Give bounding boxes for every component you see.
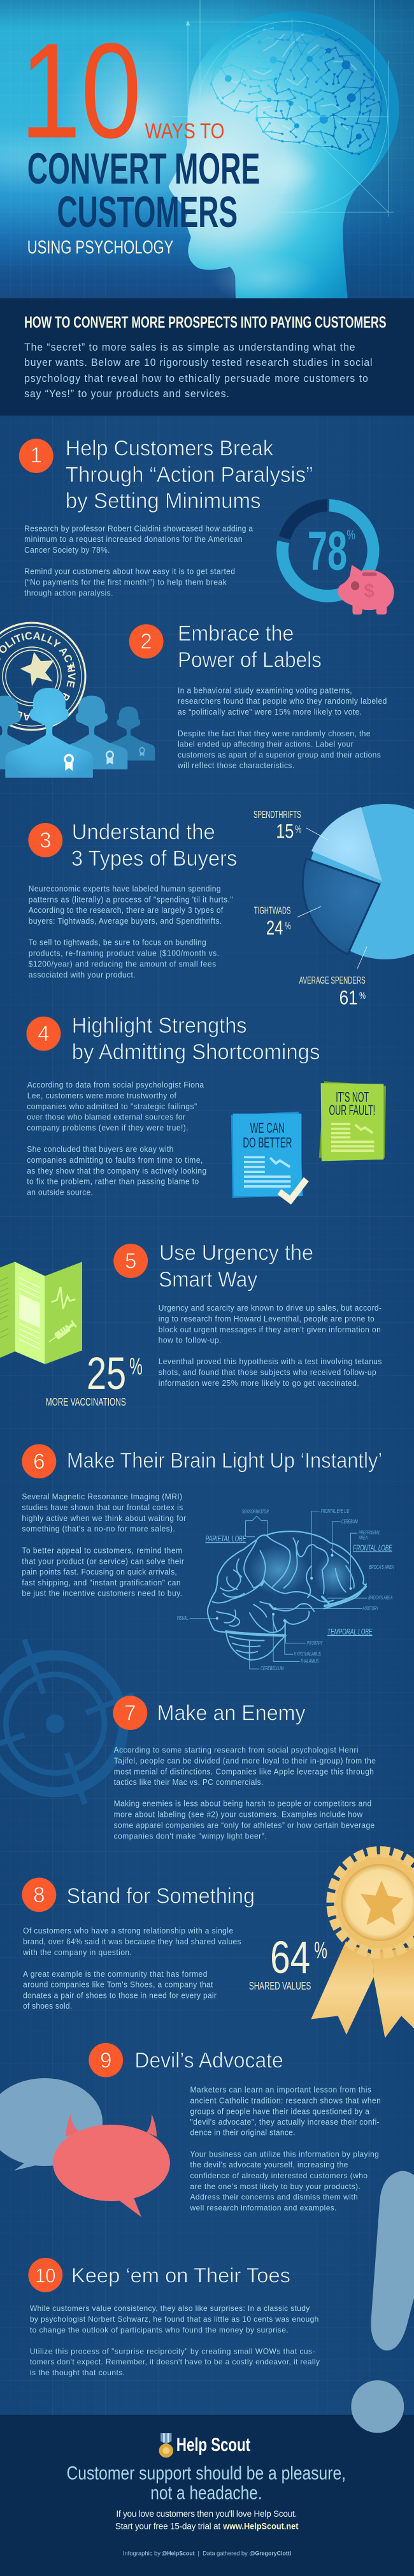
body 4: over those who blamed external sources for: [27, 1112, 185, 1121]
brain labels: AUDITORY: [362, 1606, 378, 1612]
section 1 and 2: [19, 436, 394, 615]
call to action: www.HelpScout.net: [222, 2521, 299, 2531]
body 4: to fix the problem, rather than passing blame to: [27, 1177, 199, 1186]
credits: |: [197, 2550, 199, 2557]
tagline: [66, 2463, 346, 2503]
convert more customers: CONVERT MORE: [27, 145, 260, 193]
icon: target crosshair: [0, 1640, 134, 1804]
body 9 top: dence in their original stance.: [190, 2128, 295, 2137]
badge 6: 6: [33, 1449, 45, 1474]
group of people with ribbons: [0, 688, 155, 778]
body 3: associated with your product.: [29, 970, 136, 980]
badge 9: 9: [100, 2048, 111, 2073]
badge 6: [22, 1444, 56, 1478]
brain labels: PARIETAL LOBE: [206, 1534, 246, 1543]
body 3: products, re-framing product value ($100/month vs.: [29, 949, 219, 958]
stat 64% shared values: %: [314, 1937, 327, 1963]
body 10: tomers don't expect. Remember, it doesn't have to be a costly endeavor, it really: [30, 2357, 320, 2366]
brain diagram: [176, 1508, 394, 1671]
icon: help scout medal: [159, 2433, 173, 2457]
exclamation mark: [351, 2171, 414, 2433]
body 8: with the company in question.: [22, 1948, 132, 1957]
badge 9: [89, 2043, 123, 2078]
body 4: [27, 1081, 206, 1197]
tagline: Customer support should be a pleasure,: [66, 2463, 346, 2484]
donut chart 78%: 78: [308, 520, 347, 581]
body 9 bottom: are the one's most likely to buy your products).: [190, 2182, 360, 2191]
body 7: Tajifel, people can be divided (and more loyal to their in-group) from the: [114, 1756, 376, 1765]
brain labels: CEREBELLUM: [261, 1666, 283, 1671]
brain labels: FRONTAL EYE LID: [321, 1508, 350, 1514]
body 3: buyers: Tightwads, Average buyers, and Spendthrifts.: [29, 917, 222, 926]
badge 5: [113, 1244, 148, 1278]
brain labels: HYPOTHALAMUS: [294, 1651, 321, 1657]
brain labels: SENSORIMOTOR: [242, 1509, 269, 1515]
icon: piggy bank: $: [364, 580, 375, 602]
speech bubble: blue: [0, 2078, 103, 2171]
body 4: She concluded that buyers are okay with: [27, 1145, 174, 1154]
body 1: (“No payments for the first month!”) to help them break: [24, 578, 227, 587]
body 9 top: "devil's advocate", they actually increase their confi-: [190, 2118, 380, 2127]
heading 4: [72, 1014, 320, 1065]
body 4: companies who admitted to "strategic failings": [27, 1102, 197, 1111]
brain labels: CEREBUM: [341, 1518, 358, 1525]
convert more customers: [27, 145, 260, 236]
icon: piggy bank: [338, 565, 394, 615]
body 7: tactics like their Mac vs. PC commercials.: [114, 1778, 263, 1787]
body 2: label ended up affecting their actions. Label your: [178, 739, 353, 748]
stat 25% more vaccinations: %: [129, 1352, 143, 1379]
heading 1: [66, 436, 313, 513]
brain labels: BROCA'S AREA: [368, 1595, 392, 1601]
badge 1: 1: [31, 443, 42, 468]
pie label: tightwads: [254, 905, 321, 939]
body 7: Making enemies is less about being harsh to people or competitors and: [114, 1799, 371, 1808]
body 3: $1200/year) and reducing the amount of small fees: [29, 959, 216, 969]
body 5: ing to research from Howard Leventhal, people are prone to: [159, 1314, 375, 1323]
heading 2: [178, 622, 322, 673]
call to action: If you love customers then you'll love Help Scout.: [116, 2509, 297, 2519]
body 6: highly active when we think about waiting for: [22, 1514, 186, 1523]
badge 3: 3: [39, 828, 52, 853]
body 2: researchers found that people who they randomly labeled: [178, 697, 387, 706]
body 2: In a behavioral study examining voting patterns,: [178, 686, 352, 695]
brain labels: THALAMUS: [300, 1658, 319, 1664]
hero illustration: [0, 0, 414, 304]
body 5: Urgency and scarcity are known to drive up sales, but accord-: [159, 1304, 382, 1313]
badge 4: [26, 1017, 61, 1051]
body 3: patterns as (literally) a process of "spending 'til it hurts.": [29, 895, 233, 905]
stat 64% shared values: 64: [270, 1932, 310, 1983]
heading 2: Power of Labels: [178, 648, 322, 673]
body 1: [24, 524, 253, 598]
badge 10: 10: [35, 2264, 55, 2287]
section 3 and 4: [26, 884, 386, 1292]
body 1: Remind your customers about how easy it is to get started: [24, 567, 235, 576]
stat 64% shared values: SHARED VALUES: [249, 1980, 311, 1992]
note: it's not our fault: [319, 1081, 386, 1161]
badge 2: [129, 624, 164, 659]
body 5: information were 25% more likely to go get vaccinated.: [159, 1379, 359, 1388]
body 9 bottom: Address their concerns and dismiss them with: [190, 2193, 358, 2202]
body 4: an outside source.: [27, 1188, 93, 1197]
heading 5: Use Urgency the: [159, 1241, 313, 1265]
note: it's not our fault: IT’S NOT: [336, 1089, 369, 1105]
help scout wordmark: Help Scout: [176, 2434, 250, 2456]
ways to: WAYS TO: [145, 119, 224, 143]
body 9 bottom: well research information and examples.: [189, 2204, 337, 2212]
body 8: of shoes sold.: [23, 2002, 72, 2011]
pie label: spendthrifts: SPENDTHRIFTS: [253, 810, 301, 820]
body 2: Despite the fact that they were randomly chosen, the: [178, 729, 371, 738]
pie label: spendthrifts: %: [295, 824, 302, 835]
body 9 top: groups of people have their ideas questioned by a: [190, 2107, 369, 2116]
section 9 end, section 10 and footer: [28, 2171, 368, 2557]
heading 8: Stand for Something: [66, 1884, 255, 1909]
heading 2: Embrace the: [178, 622, 294, 646]
speech bubble: red devil: [53, 2114, 170, 2217]
body 4: Lee, customers were more trustworthy of: [27, 1091, 176, 1100]
note: we can do better: WE CAN: [250, 1120, 285, 1136]
pie chart: buyer types: [303, 804, 414, 959]
body 1: Cancer Society by 78%.: [24, 546, 110, 555]
body 7: [114, 1745, 376, 1840]
heading 9: Devil’s Advocate: [134, 2048, 283, 2073]
body 5: shots, and found that those subjects who received follow-up: [159, 1368, 376, 1377]
badge 5: 5: [125, 1249, 136, 1274]
body 1: minimum to a request increased donations for the American: [24, 535, 243, 544]
body 10: to change the outlook of participants who found the money by surprise.: [30, 2325, 289, 2334]
body 10: by psychologist Norbert Schwarz, he found that as little as 10 cents was enough: [30, 2315, 318, 2324]
badge 8: [22, 1878, 56, 1912]
brain labels: VISUAL: [176, 1615, 189, 1621]
section 2: [0, 622, 387, 871]
body 6: To better appeal to customers, remind them: [22, 1546, 182, 1555]
note: we can do better: DO BETTER: [243, 1135, 292, 1151]
heading 1: by Setting Minimums: [66, 488, 261, 513]
badge 4: 4: [38, 1022, 50, 1046]
badge 3: [28, 823, 62, 857]
body 7: most menial of distinctions. Companies like Apple leverage this through: [114, 1767, 374, 1776]
body 2: customers as apart of a superior group and their actions: [178, 750, 381, 759]
heading 5: Smart Way: [159, 1267, 257, 1292]
body 8: around companies like Tom's Shoes, a company that: [23, 1980, 213, 1990]
body 2: as “politically active” were 15% more likely to vote.: [178, 708, 362, 717]
body 4: as they show that the company is actively looking: [27, 1167, 206, 1175]
body 8: donates a pair of shoes to those in need for every pair: [23, 1991, 217, 2000]
donut chart 78%: [282, 506, 373, 596]
intro paragraph: The “secret” to more sales is as simple as understanding what the: [24, 342, 355, 353]
heading 5: [159, 1241, 313, 1292]
note: we can do better: [231, 1112, 306, 1200]
heading 4: Highlight Strengths: [72, 1014, 247, 1038]
badge 7: 7: [124, 1701, 136, 1726]
call to action: Start your free 15-day trial at: [115, 2521, 220, 2531]
stat 25% more vaccinations: 25: [87, 1348, 126, 1399]
brain labels: BROCA'S AREA: [369, 1564, 394, 1570]
stat 64% shared values: [249, 1932, 327, 1992]
body 5: block out urgent messages if they aren't given information on: [159, 1325, 381, 1334]
heading 10: Keep ‘em on Their Toes: [71, 2264, 290, 2287]
brain labels: [176, 1508, 394, 1671]
tagline: not a headache.: [150, 2483, 262, 2503]
blueprint guide lines: [172, 0, 394, 217]
body 3: According to the research, there are largely 3 types of: [29, 906, 224, 915]
body 8: Of customers who have a strong relationship with a single: [23, 1926, 233, 1935]
pie label: tightwads: %: [285, 921, 291, 932]
body 9 top: the devil's advocate yourself, increasing the: [190, 2160, 348, 2169]
credits: @HelpScout: [162, 2550, 195, 2557]
body 6: pain points fast. Focusing on quick arrivals,: [22, 1568, 177, 1576]
body 9 top: ancient Catholic tradition: research shows that when: [190, 2096, 381, 2105]
stamp: politically active: [0, 622, 87, 731]
body 6: studies have shown that our frontal cortex is: [22, 1503, 183, 1512]
brain labels: PREFRONTAL: [359, 1530, 380, 1536]
pie label: average spenders: AVERAGE SPENDERS: [299, 975, 366, 986]
stamp: politically active: ★: [66, 663, 74, 671]
call to action: [115, 2509, 299, 2531]
body 9 bottom: confidence of already interested customers (who: [190, 2171, 368, 2180]
body 10: While customers value consistency, they also like surprises: In a classic study: [30, 2304, 310, 2313]
body 10: Utilize this process of "surprise reciprocity" by creating small WOWs that cus-: [30, 2347, 315, 2355]
badge 2: 2: [140, 629, 152, 654]
body 3: [29, 884, 233, 980]
pie label: spendthrifts: 15: [276, 820, 294, 843]
intro paragraph: [24, 342, 373, 400]
body 8: brand, over 64% said it was because they had shared values: [23, 1937, 241, 1946]
credits: Infographic by: [123, 2550, 161, 2557]
intro paragraph: psychology that reveal how to ethically persuade more customers to: [24, 373, 368, 384]
body 9 top: Your business can utilize this information by playing: [190, 2150, 379, 2159]
body 6: be just the incentive customers need to buy.: [22, 1589, 182, 1598]
brain labels: TEMPORAL LOBE: [327, 1627, 373, 1636]
body 10: is the thought that counts.: [30, 2368, 125, 2377]
body 7: more about labeling (see #2) your customers. Examples include how: [114, 1810, 362, 1819]
pie label: tightwads: 24: [266, 917, 283, 939]
head silhouette with brain network: [169, 11, 399, 304]
note: it's not our fault: OUR FAULT!: [329, 1102, 375, 1118]
credits: [123, 2550, 291, 2557]
body 6: something (that's a no-no for more sales).: [22, 1524, 175, 1534]
brain labels: FRONTAL LOBE: [353, 1543, 392, 1553]
footer background: [0, 2415, 414, 2576]
body 2: [177, 686, 387, 770]
pie label: tightwads: TIGHTWADS: [254, 905, 290, 917]
body 4: companies admitting to faults from time to time,: [27, 1156, 203, 1165]
brain labels: AREA: [358, 1535, 368, 1541]
intro paragraph: buyer wants. Below are 10 rigorously tested research studies in social: [24, 357, 373, 368]
body 8: A great example is the community that has formed: [23, 1970, 208, 1979]
heading 1: Through “Action Paralysis”: [66, 462, 313, 487]
body 2: will reflect those characteristics.: [177, 761, 294, 770]
pie label: average spenders: %: [359, 991, 366, 1001]
heading 7: Make an Enemy: [157, 1701, 306, 1725]
heading 3: [71, 820, 237, 871]
body 9 bottom: [189, 2171, 368, 2212]
body 8: [22, 1926, 241, 2011]
using psychology: USING PSYCHOLOGY: [27, 237, 174, 258]
brain leader lines: [190, 1511, 367, 1669]
heading 1: Help Customers Break: [66, 436, 274, 461]
body 5: how to follow-up.: [159, 1335, 221, 1344]
body 5: Leventhal proved this hypothesis with a test involving tetanus: [159, 1357, 382, 1366]
big number 10: 10: [20, 15, 141, 167]
body 5: [159, 1304, 382, 1388]
section 7 to 9: [22, 1745, 414, 2169]
body 9 top: Marketers can learn an important lesson from this: [190, 2085, 371, 2095]
body 4: According to data from social psychologist Fiona: [27, 1081, 204, 1089]
icon: gold rosette: [311, 1851, 414, 2038]
body 6: Several Magnetic Resonance Imaging (MRI): [22, 1492, 182, 1501]
section 7 heading: [113, 1696, 306, 1730]
pie label: average spenders: 61: [339, 986, 358, 1009]
badge 1: [19, 439, 54, 473]
body 3: To sell to tightwads, be sure to focus on bundling: [29, 938, 206, 947]
body 10: [30, 2304, 320, 2377]
section 5 and 6: [22, 1304, 394, 1671]
badge 10: [28, 2258, 62, 2292]
stat 25% more vaccinations: MORE VACCINATIONS: [46, 1395, 126, 1408]
body 1: through action paralysis.: [24, 588, 113, 598]
body 6: [22, 1492, 186, 1598]
body 3: Neureconomic experts have labeled human spending: [29, 884, 221, 894]
heading 3: Understand the: [72, 820, 215, 845]
body 9 top: [190, 2085, 381, 2169]
body 6: fast shipping, and "instant gratification" can: [22, 1578, 181, 1587]
body 4: company problems (even if they were true!).: [27, 1123, 189, 1132]
body 7: According to some starting research from social psychologist Henri: [114, 1745, 359, 1755]
heading 4: by Admitting Shortcomings: [72, 1040, 320, 1065]
convert more customers: CUSTOMERS: [57, 188, 238, 236]
brain labels: PITUITARY: [307, 1640, 323, 1646]
credits: @GregoryCiotti: [250, 2550, 291, 2557]
badge 7: [113, 1696, 147, 1730]
body 1: Research by professor Robert Cialdini showcased how adding a: [24, 524, 253, 534]
body 6: that your product (or service) can solve their: [22, 1557, 184, 1566]
hero title: [20, 15, 260, 258]
intro band: [0, 298, 414, 416]
stat 25% more vaccinations: [46, 1348, 143, 1408]
body 7: some apparel companies are “only for athletes” or how certain beverage: [114, 1821, 375, 1830]
heading 6: Make Their Brain Light Up ‘Instantly’: [67, 1448, 382, 1473]
pie label: average spenders: [299, 947, 367, 1009]
pie label: spendthrifts: [253, 810, 328, 843]
intro paragraph: say “Yes!” to your products and services.: [24, 388, 229, 400]
donut chart 78%: %: [346, 528, 355, 542]
badge 8: 8: [33, 1882, 45, 1907]
body 7: companies don't make "wimpy light beer".: [114, 1831, 267, 1840]
heading 3: 3 Types of Buyers: [71, 846, 237, 871]
credits: Data gathered by: [203, 2550, 248, 2557]
icon: vaccination brochure: [0, 1262, 82, 1364]
